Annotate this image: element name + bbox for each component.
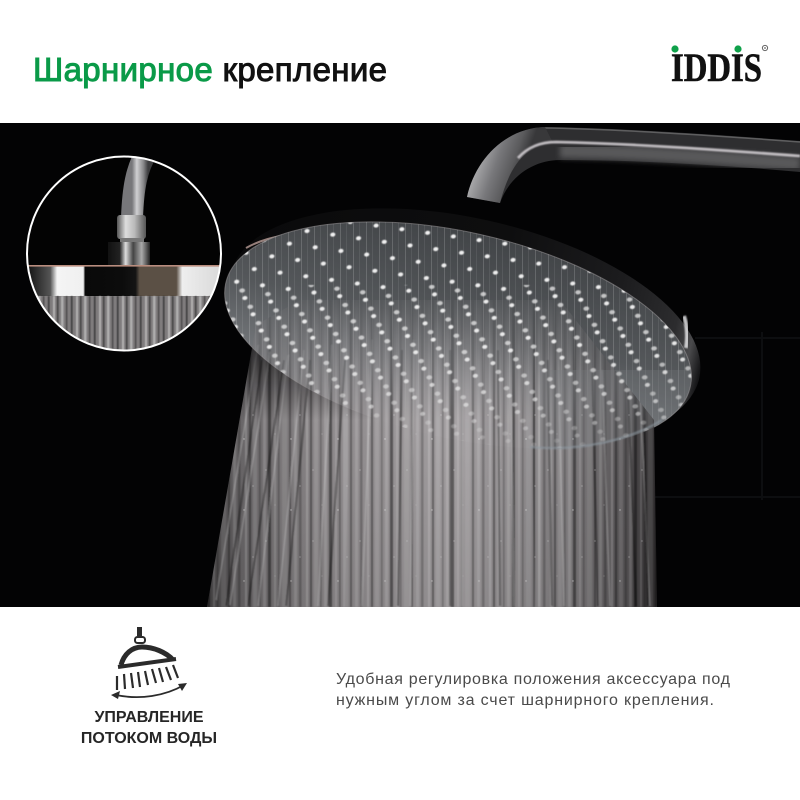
logo: IDDIS: IDDIS [671, 45, 762, 90]
shower head rim [246, 208, 700, 413]
icon label: ПОТОКОМ ВОДЫ [81, 730, 217, 747]
icon: shower flow control [111, 627, 187, 699]
title: Шарнирное крепление [33, 51, 387, 88]
description text [336, 671, 731, 709]
inset disc [27, 265, 221, 296]
nozzle dots [220, 215, 700, 455]
shower head face [224, 221, 692, 428]
icon label [81, 709, 217, 747]
inset pipe [132, 150, 148, 218]
photo: shower head with water [0, 123, 800, 610]
lower face edge over water [530, 370, 700, 450]
shower arm pipe [467, 127, 800, 203]
icon label: УПРАВЛЕНИЕ [94, 709, 204, 726]
inset circle: swivel joint close-up [27, 150, 221, 354]
inset joint cylinder [108, 242, 150, 266]
inset water [38, 296, 210, 350]
water streams [200, 290, 665, 610]
background tile joints [650, 332, 800, 500]
description text: Удобная регулировка положения аксессуара под [336, 671, 731, 688]
description text: нужным углом за счет шарнирного крепления. [336, 692, 714, 709]
